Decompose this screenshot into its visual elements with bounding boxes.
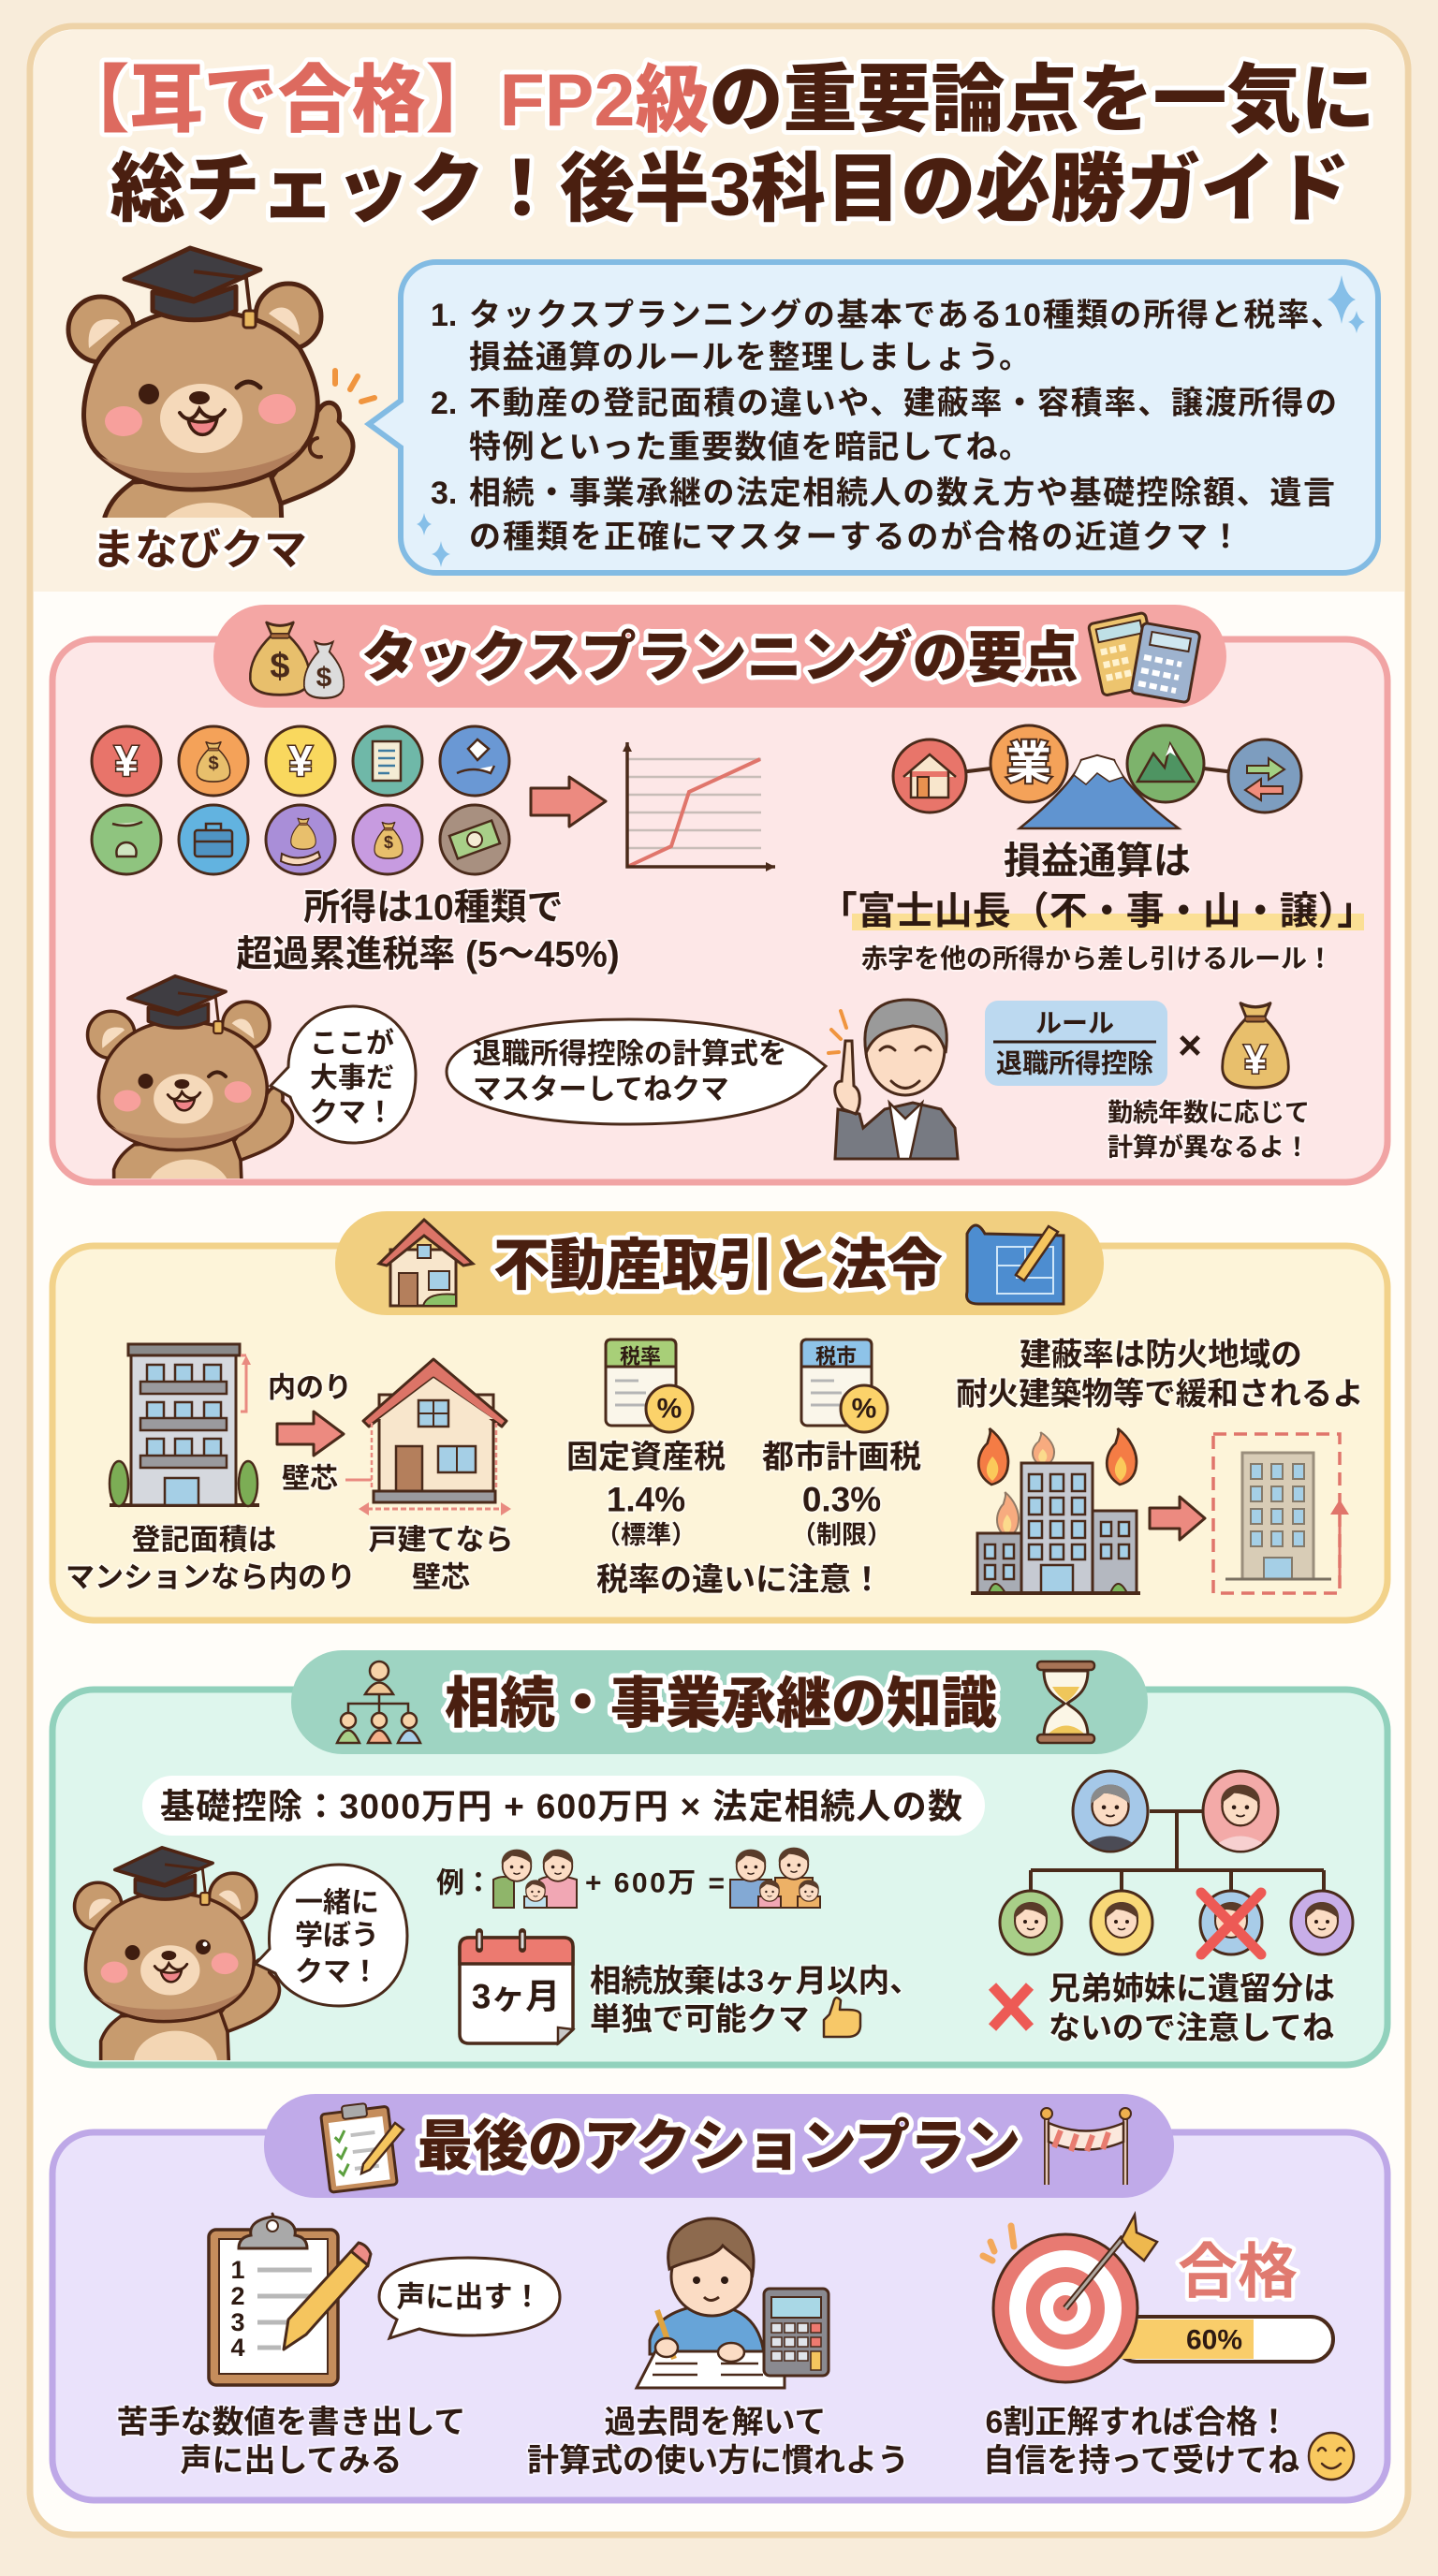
label: inner measure: 内のり xyxy=(268,1372,352,1404)
heading: real estate: 不動産取引と法令 xyxy=(493,1234,943,1297)
text: profit and loss offset: 赤字を他の所得から差し引けるルール！ xyxy=(861,944,1333,973)
illustration: man pointing xyxy=(829,1000,958,1159)
heading: real estate xyxy=(335,1211,1104,1315)
arrow xyxy=(1150,1497,1205,1540)
formula pill: 基礎控除：3000万円 + 600万円 × 法定相続人の数 xyxy=(160,1788,962,1825)
speech bubble: 声に出す: 声に出す！ xyxy=(397,2280,541,2314)
text: registered area: 壁芯 xyxy=(412,1561,470,1593)
text: tax rates: （制限） xyxy=(791,1521,892,1549)
text: tax rates: 固定資産税 xyxy=(566,1440,726,1475)
text: renunciation xyxy=(590,1964,921,2037)
speech bubble: ここが大事だクマ: ここが xyxy=(310,1028,394,1060)
arrow xyxy=(531,777,606,827)
label: 合格: 合格 xyxy=(1178,2238,1298,2305)
text: income types: 超過累進税率 (5〜45%) xyxy=(236,934,620,975)
text: tax rates xyxy=(566,1440,921,1598)
illustration: buildings in fire zone xyxy=(971,1428,1140,1593)
illustration: boy studying xyxy=(637,2218,829,2388)
icon: thumbs up xyxy=(824,1998,860,2037)
text: past exams: 計算式の使い方に慣れよう xyxy=(527,2443,909,2479)
text: renunciation: 相続放棄は3ヶ月以内、 xyxy=(590,1964,921,1999)
illustration: clipboard and pencil xyxy=(209,2214,371,2385)
speech bubble: 声に出す xyxy=(379,2258,560,2338)
income type icons: $ xyxy=(208,754,219,774)
sparkles xyxy=(417,275,1365,567)
icon: red cross xyxy=(992,1986,1030,2027)
income type icons: $ xyxy=(384,833,393,852)
text: profit and loss offset: 損益通算は xyxy=(1004,841,1191,882)
text: registered area xyxy=(66,1524,513,1593)
heading: tax planning xyxy=(213,605,1226,708)
speech bubble: ここが大事だクマ: 大事だ xyxy=(310,1063,394,1093)
text: income types xyxy=(236,887,620,975)
icon: property tax doc: % xyxy=(657,1393,682,1425)
title xyxy=(56,58,1374,230)
numbered points: タックスプランニングの基本である10種類の所得と税率、 xyxy=(469,298,1343,333)
title: 【耳で合格】FP2級の重要論点を一気に xyxy=(56,58,1374,140)
text: tax rates: 1.4% xyxy=(607,1481,685,1518)
numbered points: 特例といった重要数値を暗記してね。 xyxy=(469,430,1031,465)
numbered points: 相続・事業承継の法定相続人の数え方や基礎控除額、遺言 xyxy=(469,476,1335,511)
illustration: apartment with inner measure xyxy=(110,1344,259,1506)
text: registered area: 登記面積は xyxy=(131,1524,277,1556)
text: years of service xyxy=(1108,1099,1310,1162)
example formula: + 600万 = xyxy=(585,1868,725,1898)
icon: property tax doc xyxy=(606,1339,693,1432)
chart: progressive tax xyxy=(623,742,775,871)
speech bubble: 一緒に学ぼうクマ: 一緒に xyxy=(295,1887,379,1919)
speech bubble: 一緒に学ぼうクマ: クマ！ xyxy=(295,1956,379,1988)
text: pass with 60% xyxy=(983,2405,1299,2479)
text: pass with 60%: 6割正解すれば合格！ xyxy=(986,2405,1289,2440)
text: income types: 所得は10種類で xyxy=(303,887,564,929)
heading: inheritance xyxy=(291,1650,1148,1754)
icon: blueprint xyxy=(966,1225,1064,1304)
text: pass with 60%: 自信を持って受けてね xyxy=(983,2443,1299,2479)
title: 総チェック！後半3科目の必勝ガイド xyxy=(110,148,1350,230)
speech bubble: 退職所得控除 xyxy=(447,1019,826,1124)
text: tax rates: 0.3% xyxy=(802,1481,881,1518)
icon: yen bag: ¥ xyxy=(1244,1037,1268,1082)
panel: tax planning xyxy=(52,605,1387,1242)
text: building coverage xyxy=(956,1339,1364,1412)
numbered points xyxy=(431,298,1343,555)
label: wall center xyxy=(282,1464,372,1494)
speech bubble: 退職所得控除: マスターしてねクマ xyxy=(473,1074,729,1105)
progress bar 60%: 60% xyxy=(1186,2325,1242,2355)
label: wall center: 壁芯 xyxy=(282,1464,338,1494)
icon: calculators xyxy=(1088,612,1200,703)
numbered points: 2. xyxy=(431,386,457,421)
multiply sign: × xyxy=(1178,1022,1202,1069)
heading: tax planning: タックスプランニングの要点 xyxy=(361,627,1078,689)
icon: city planning tax doc: % xyxy=(852,1393,876,1425)
panel: action plan xyxy=(52,2094,1387,2500)
speech bubble: 退職所得控除: 退職所得控除の計算式を xyxy=(473,1038,786,1070)
example formula xyxy=(436,1848,820,1908)
text: tax rates: （標準） xyxy=(595,1521,697,1549)
text: write out numbers xyxy=(117,2405,465,2479)
text: registered area: マンションなら内のり xyxy=(66,1561,356,1593)
example formula: 例： xyxy=(436,1868,492,1898)
speech bubble: ここが大事だクマ xyxy=(271,1006,416,1143)
text: tax rates: 都市計画税 xyxy=(762,1440,921,1475)
rule card: ルール xyxy=(1035,1009,1114,1037)
progress bar 60% xyxy=(1114,2317,1333,2362)
icon: hourglass xyxy=(1037,1661,1094,1743)
text: past exams xyxy=(527,2405,909,2479)
text: registered area: 戸建てなら xyxy=(369,1524,513,1556)
numbered points: 不動産の登記面積の違いや、建蔽率・容積率、譲渡所得の xyxy=(469,386,1337,421)
text: tax rates: 税率の違いに注意！ xyxy=(596,1562,883,1598)
text: years of service: 計算が異なるよ！ xyxy=(1108,1133,1310,1162)
heading: action plan: 最後のアクションプラン xyxy=(418,2115,1020,2177)
panel: inheritance xyxy=(52,1650,1387,2114)
icon: smiley xyxy=(1309,2433,1354,2480)
icon: calendar 3 months xyxy=(460,1932,573,2043)
icon: Fuji mnemonic: 業 xyxy=(1006,739,1051,788)
numbered points: 1. xyxy=(431,298,457,333)
family tree xyxy=(1000,1771,1353,1954)
illustration: eased building coverage xyxy=(1213,1434,1349,1593)
heading: action plan xyxy=(264,2094,1174,2198)
illustration: clipboard and pencil: 4 xyxy=(230,2334,245,2362)
panel: real estate xyxy=(52,1211,1387,1620)
numbered points: 3. xyxy=(431,476,457,511)
arrow xyxy=(277,1412,344,1456)
text: write out numbers: 苦手な数値を書き出して xyxy=(117,2405,465,2440)
icon: checklist xyxy=(320,2100,404,2192)
text: profit and loss offset: 「富士山長（不・事・山・譲）」 xyxy=(819,889,1375,932)
icon: family organization xyxy=(337,1661,420,1743)
text: siblings: 兄弟姉妹に遺留分は xyxy=(1049,1971,1335,2007)
mascot: まなびクマ: まなびクマ xyxy=(92,525,307,574)
illustration: clipboard and pencil: 2 xyxy=(230,2282,245,2310)
speech bubble: ここが大事だクマ: クマ！ xyxy=(310,1097,394,1129)
text: building coverage: 耐火建築物等で緩和されるよ xyxy=(956,1378,1364,1412)
rule card xyxy=(985,1001,1167,1086)
income type icons: ¥ xyxy=(114,737,139,785)
speech bubble: 一緒に学ぼうクマ: 学ぼう xyxy=(295,1921,379,1951)
icon: money bags: $ xyxy=(316,663,332,693)
mascot bear xyxy=(86,974,294,1178)
icon: city planning tax doc xyxy=(801,1339,888,1432)
icon: money bags xyxy=(250,622,344,698)
income type icons: ¥ xyxy=(288,737,313,785)
illustration: clipboard and pencil: 3 xyxy=(230,2308,245,2336)
text: renunciation: 単独で可能クマ xyxy=(590,2003,809,2037)
heading: inheritance: 相続・事業承継の知識 xyxy=(445,1673,997,1734)
icon: city planning tax doc: 税市 xyxy=(815,1344,857,1368)
numbered points: の種類を正確にマスターするのが合格の近道クマ！ xyxy=(469,519,1241,555)
intro speech bubble xyxy=(369,262,1378,573)
icon: yen bag xyxy=(1223,1003,1288,1088)
mascot bear xyxy=(73,1846,281,2060)
text: profit and loss offset xyxy=(819,841,1375,973)
mascot: まなびクマ xyxy=(66,245,377,571)
rule card: 退職所得控除 xyxy=(996,1048,1153,1078)
text: building coverage: 建蔽率は防火地域の xyxy=(1020,1339,1302,1372)
formula pill xyxy=(142,1776,985,1836)
numbered points: 損益通算のルールを整理しましょう。 xyxy=(469,340,1031,375)
icon: calendar 3 months: 3ヶ月 xyxy=(472,1977,560,2016)
illustration: house with wall-center measure xyxy=(359,1359,511,1515)
speech bubble: 一緒に学ぼうクマ xyxy=(256,1865,407,2006)
icon: money bags: $ xyxy=(270,647,290,686)
text: past exams: 過去問を解いて xyxy=(605,2405,826,2440)
icon: finish ribbon xyxy=(1041,2108,1131,2185)
illustration: target with arrow xyxy=(983,2215,1157,2382)
income type icons xyxy=(92,726,509,874)
illustration: clipboard and pencil: 1 xyxy=(230,2256,245,2284)
text: write out numbers: 声に出してみる xyxy=(181,2443,402,2479)
text: siblings: ないので注意してね xyxy=(1049,2011,1334,2046)
icon: Fuji mnemonic xyxy=(893,725,1301,828)
text: years of service: 勤続年数に応じて xyxy=(1108,1099,1310,1127)
icon: property tax doc: 税率 xyxy=(620,1344,661,1368)
text: siblings xyxy=(1049,1971,1335,2046)
icon: house xyxy=(379,1220,473,1306)
